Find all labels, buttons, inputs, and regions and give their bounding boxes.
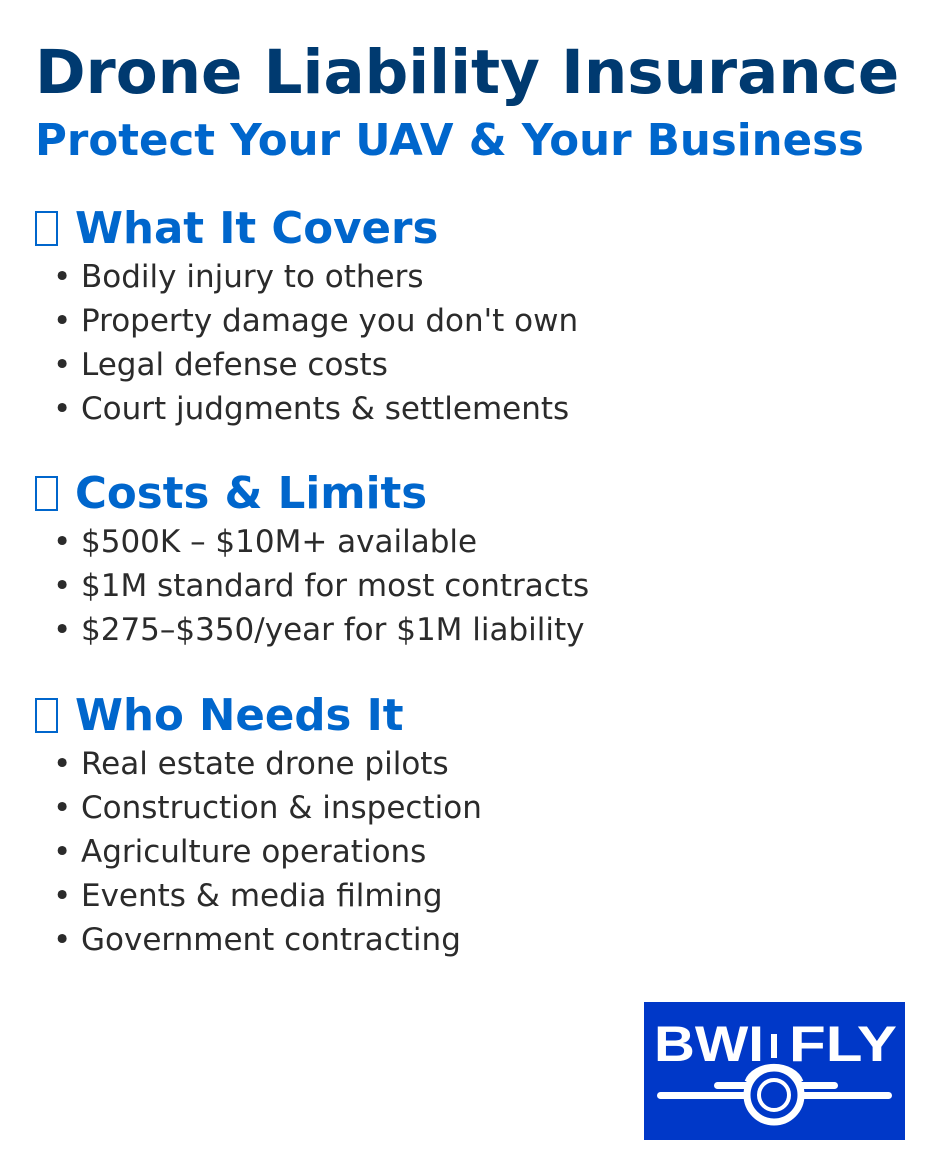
list: covers [53, 259, 578, 427]
list: costs: $500K – $10M+ available [81, 524, 477, 560]
list: covers: Property damage you don't own [81, 303, 578, 339]
list: who: Real estate drone pilots [81, 746, 449, 782]
list: covers: Court judgments & settlements [81, 391, 569, 427]
list: covers: Bodily injury to others [81, 259, 424, 295]
list: costs: $1M standard for most contracts [81, 568, 589, 604]
heading: costs: Costs & Limits [75, 469, 427, 519]
list: who [53, 746, 482, 958]
list: who: Construction & inspection [81, 790, 482, 826]
section: what it covers [35, 204, 578, 427]
list: costs [53, 524, 589, 648]
list: covers: • [53, 259, 71, 295]
list: who: • [53, 834, 71, 870]
list: who: Events & media filming [81, 878, 443, 914]
list: covers: Legal defense costs [81, 347, 388, 383]
logo: BWI FLY: FLY [789, 1016, 897, 1072]
list: covers: • [53, 391, 71, 427]
list: costs: • [53, 612, 71, 648]
list: costs: • [53, 568, 71, 604]
subtitle: Protect Your UAV & Your Business [35, 116, 864, 166]
heading: what it covers: What It Covers [75, 204, 438, 254]
section: costs & limits [35, 469, 589, 648]
list: who: • [53, 922, 71, 958]
list: costs: $275–$350/year for $1M liability [81, 612, 585, 648]
list: who: Agriculture operations [81, 834, 426, 870]
list: who: • [53, 790, 71, 826]
list: who: • [53, 746, 71, 782]
list: who: • [53, 878, 71, 914]
list: who: Government contracting [81, 922, 461, 958]
title: Drone Liability Insurance [35, 37, 899, 108]
logo: BWI FLY: BWI [654, 1016, 764, 1072]
list: covers: • [53, 347, 71, 383]
logo: BWI FLY [644, 1002, 905, 1140]
list: costs: • [53, 524, 71, 560]
list: covers: • [53, 303, 71, 339]
heading: who: Who Needs It [75, 691, 404, 741]
section: who needs it [35, 691, 482, 958]
